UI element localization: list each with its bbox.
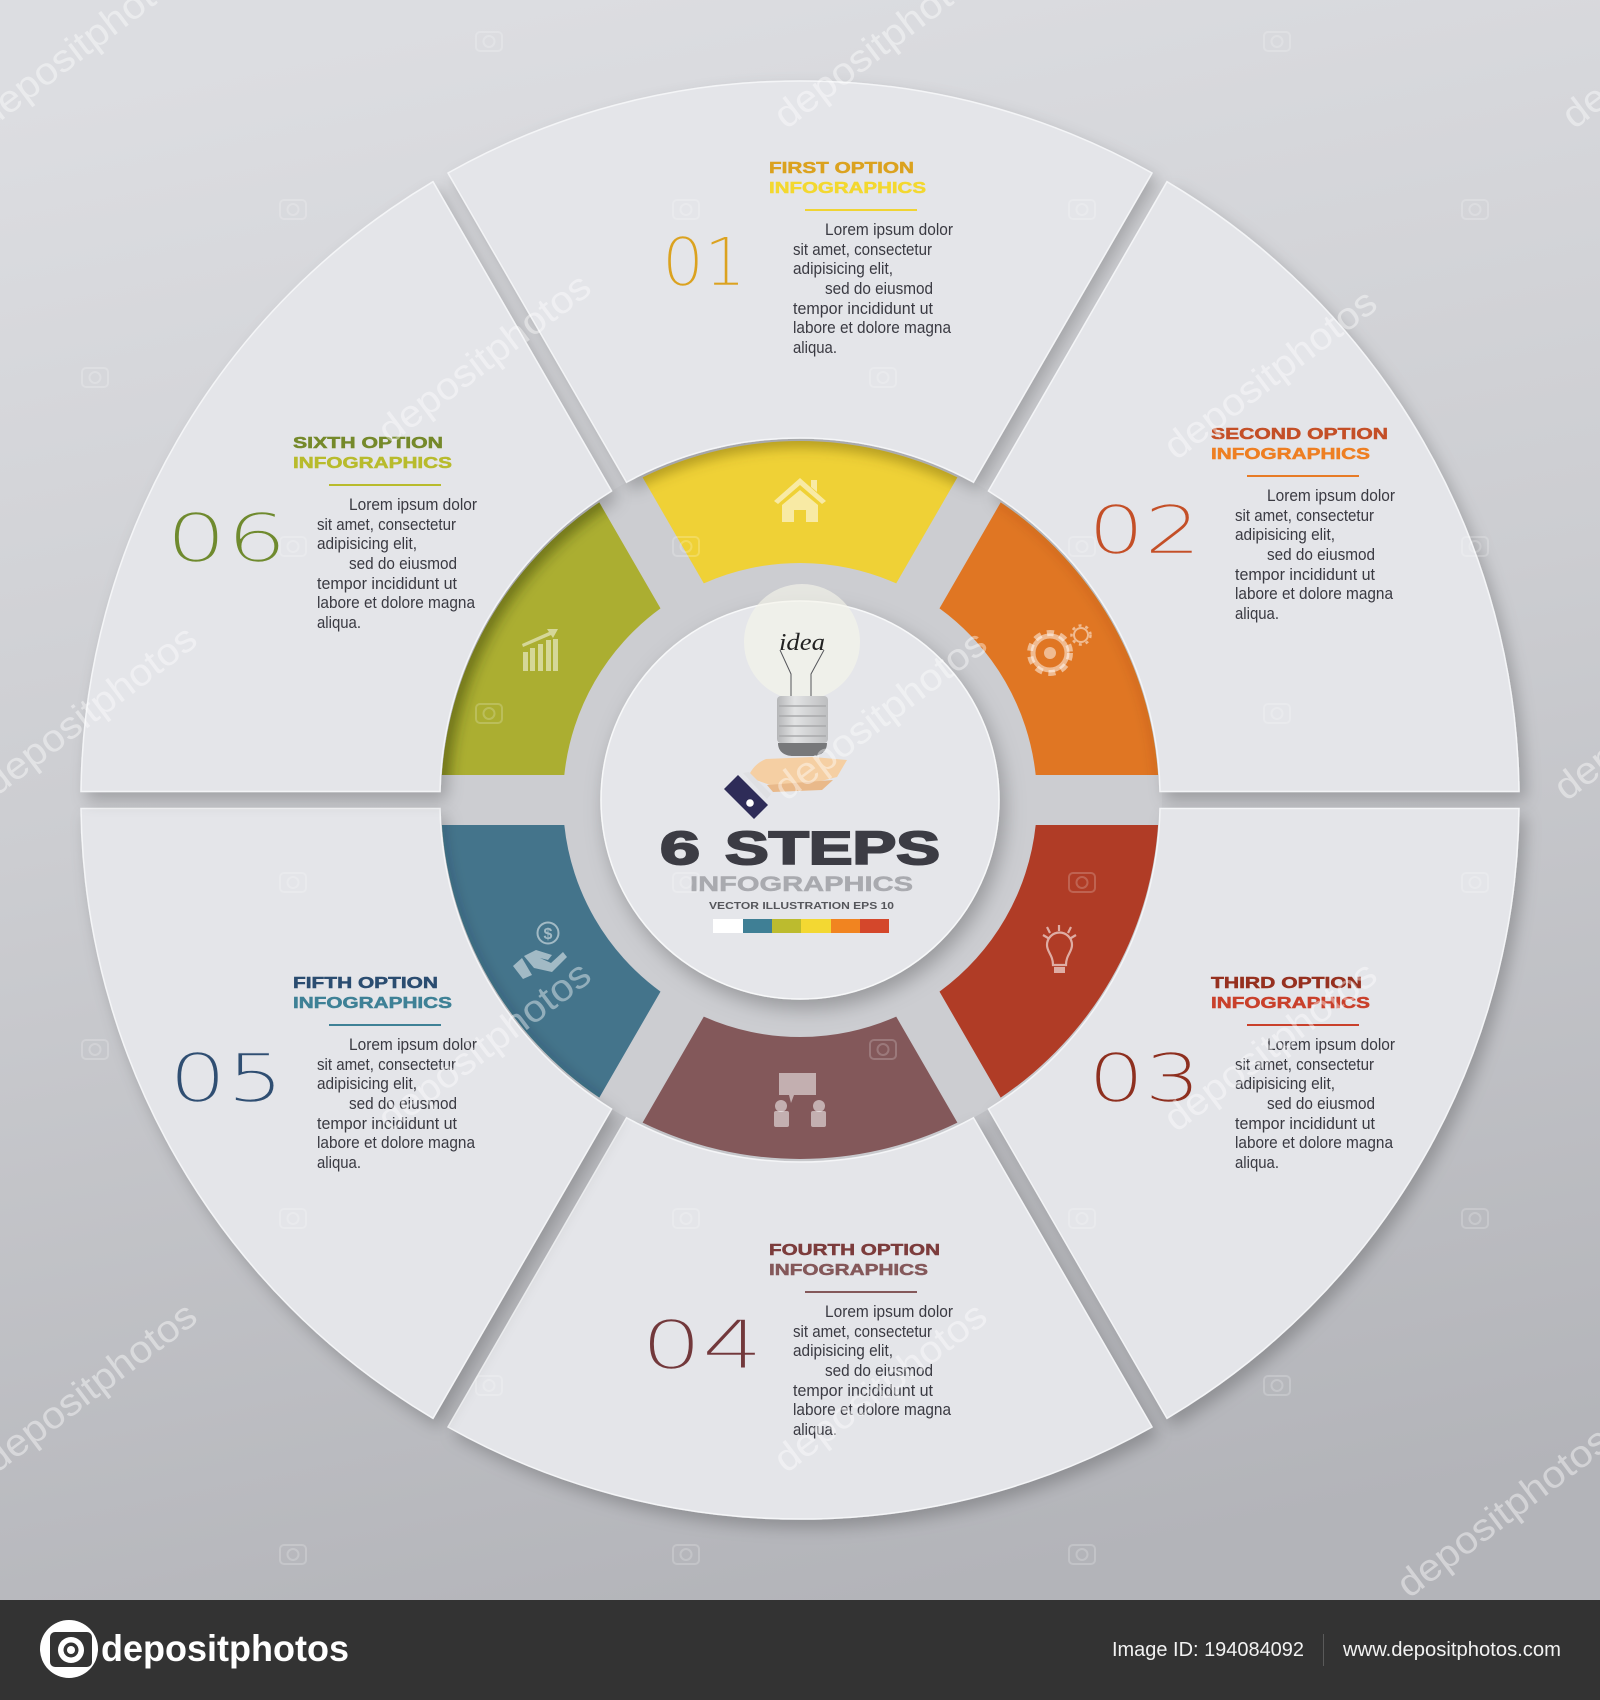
icon: hand with coin xyxy=(513,922,567,979)
ring segment: green with chart icon xyxy=(442,502,660,775)
panel: first option segment xyxy=(448,81,1152,482)
text block: fourth option: tempor incididunt ut xyxy=(793,1382,933,1400)
watermark: stock photo text: depositphotos xyxy=(766,622,995,809)
inner ring backdrop xyxy=(438,438,1162,1162)
text block: fifth option: FIFTH OPTION xyxy=(293,975,438,992)
text block: fourth option: FOURTH OPTION xyxy=(769,1242,940,1259)
icon: footer logo camera xyxy=(40,1620,98,1678)
text block: second option xyxy=(1211,426,1395,623)
text block: fourth option: sed do eiusmod xyxy=(825,1362,933,1380)
ring segment: blue with money icon xyxy=(442,825,660,1098)
number: 06: 06 xyxy=(166,500,287,577)
text block: third option: THIRD OPTION xyxy=(1211,975,1362,992)
text block: fourth option: sit amet, consectetur xyxy=(793,1323,932,1341)
number: 03: 03 xyxy=(1088,1040,1201,1117)
text block: sixth option: sit amet, consectetur xyxy=(317,516,456,534)
icon: gears xyxy=(1030,626,1090,673)
text block: fifth option: Lorem ipsum dolor xyxy=(349,1036,477,1054)
image id: Image ID: 194084092 xyxy=(1112,1639,1304,1661)
text block: first option: labore et dolore magna xyxy=(793,319,952,337)
text block: first option: FIRST OPTION xyxy=(769,160,914,177)
subtitle: infographics: INFOGRAPHICS xyxy=(690,873,913,896)
center circle xyxy=(601,601,999,999)
number: 05: 05 xyxy=(169,1040,284,1117)
text block: sixth option: SIXTH OPTION xyxy=(293,435,443,452)
text block: fifth option: aliqua. xyxy=(317,1154,361,1172)
text block: fourth option: Lorem ipsum dolor xyxy=(825,1303,953,1321)
watermark: camera marks xyxy=(82,32,1488,1564)
title: 6 steps: 6 xyxy=(660,822,700,874)
text block: sixth option: labore et dolore magna xyxy=(317,594,476,612)
icon: growth chart xyxy=(522,629,558,671)
text block: fifth option: sed do eiusmod xyxy=(349,1095,457,1113)
text block: fifth option xyxy=(293,975,477,1172)
icon: house xyxy=(774,478,826,522)
text block: second option: INFOGRAPHICS xyxy=(1211,446,1370,463)
text block: fourth option: INFOGRAPHICS xyxy=(769,1262,928,1279)
text block: second option: aliqua. xyxy=(1235,605,1279,623)
title: 6 steps xyxy=(660,822,940,874)
color legend bar xyxy=(713,919,889,933)
panel: fourth option segment xyxy=(448,1118,1152,1519)
website url: www.depositphotos.com xyxy=(1342,1639,1561,1661)
text block: fourth option: labore et dolore magna xyxy=(793,1401,952,1419)
text block: sixth option xyxy=(293,435,477,632)
ring segment: red with bulb icon xyxy=(940,825,1158,1098)
text block: third option: labore et dolore magna xyxy=(1235,1134,1394,1152)
text block: sixth option: adipisicing elit, xyxy=(317,535,417,553)
ring segment: brown with people icon xyxy=(643,1017,957,1159)
text block: second option: labore et dolore magna xyxy=(1235,585,1394,603)
text block: fifth option: adipisicing elit, xyxy=(317,1075,417,1093)
icon: people talking xyxy=(774,1073,826,1127)
text block: first option: Lorem ipsum dolor xyxy=(825,221,953,239)
icon: light bulb xyxy=(1043,925,1076,970)
panel: fifth option segment xyxy=(81,808,612,1418)
number: 04: 04 xyxy=(641,1307,763,1384)
text block: second option: sit amet, consectetur xyxy=(1235,507,1374,525)
watermark: stock photo text: depositphotos xyxy=(766,1294,995,1481)
text block: fourth option: adipisicing elit, xyxy=(793,1342,893,1360)
text block: first option: sed do eiusmod xyxy=(825,280,933,298)
text block: third option: aliqua. xyxy=(1235,1154,1279,1172)
text block: first option: tempor incididunt ut xyxy=(793,300,933,318)
text block: fifth option: sit amet, consectetur xyxy=(317,1056,456,1074)
text block: fifth option: labore et dolore magna xyxy=(317,1134,476,1152)
text block: second option: adipisicing elit, xyxy=(1235,526,1335,544)
icon: hand holding bulb xyxy=(724,757,847,819)
text block: fourth option xyxy=(769,1242,953,1439)
footer logo text: depositphotos xyxy=(101,1628,349,1669)
panel: third option segment xyxy=(988,808,1519,1418)
text block: fourth option: aliqua. xyxy=(793,1421,837,1439)
number: 02: 02 xyxy=(1088,492,1201,569)
text block: sixth option: aliqua. xyxy=(317,614,361,632)
text block: third option: INFOGRAPHICS xyxy=(1211,995,1370,1012)
text block: fifth option: INFOGRAPHICS xyxy=(293,995,452,1012)
text block: sixth option: INFOGRAPHICS xyxy=(293,455,452,472)
text block: third option: tempor incididunt ut xyxy=(1235,1115,1375,1133)
number: 01: 01 xyxy=(662,224,746,301)
text block: first option: adipisicing elit, xyxy=(793,260,893,278)
icon: hand with coin: $ xyxy=(544,926,553,943)
text block: sixth option: tempor incididunt ut xyxy=(317,575,457,593)
panel: sixth option segment xyxy=(81,182,612,791)
text block: second option: SECOND OPTION xyxy=(1211,426,1388,443)
caption: vector illustration: VECTOR ILLUSTRATION EPS 10 xyxy=(709,900,894,912)
text block: third option: sed do eiusmod xyxy=(1267,1095,1375,1113)
watermark: stock photo text: depositphotos xyxy=(370,953,599,1140)
text block: third option: Lorem ipsum dolor xyxy=(1267,1036,1395,1054)
text block: third option xyxy=(1211,975,1395,1172)
text block: second option: Lorem ipsum dolor xyxy=(1267,487,1395,505)
text block: first option xyxy=(769,160,953,357)
text block: first option: sit amet, consectetur xyxy=(793,241,932,259)
watermark: stock photo text: depositphotos xyxy=(370,265,599,452)
watermark: stock photo text: depositphotos xyxy=(1156,953,1385,1140)
title: 6 steps: STEPS xyxy=(725,822,940,874)
watermark: stock photo text: depositphotos xyxy=(1156,281,1385,468)
text block: first option: aliqua. xyxy=(793,339,837,357)
text block: sixth option: Lorem ipsum dolor xyxy=(349,496,477,514)
ring segment: orange with gears icon xyxy=(940,502,1158,775)
icon: idea light bulb: idea xyxy=(779,630,825,656)
text block: second option: sed do eiusmod xyxy=(1267,546,1375,564)
footer bar xyxy=(0,1600,1600,1700)
text block: first option: INFOGRAPHICS xyxy=(769,180,926,197)
panel: second option segment xyxy=(988,182,1519,791)
text block: third option: adipisicing elit, xyxy=(1235,1075,1335,1093)
text block: sixth option: sed do eiusmod xyxy=(349,555,457,573)
watermark: stock photo text: depositphotos xyxy=(1389,1419,1600,1606)
text block: fifth option: tempor incididunt ut xyxy=(317,1115,457,1133)
icon: idea light bulb xyxy=(744,584,860,756)
text block: second option: tempor incididunt ut xyxy=(1235,566,1375,584)
text block: third option: sit amet, consectetur xyxy=(1235,1056,1374,1074)
ring segment: yellow with home icon xyxy=(642,441,958,584)
